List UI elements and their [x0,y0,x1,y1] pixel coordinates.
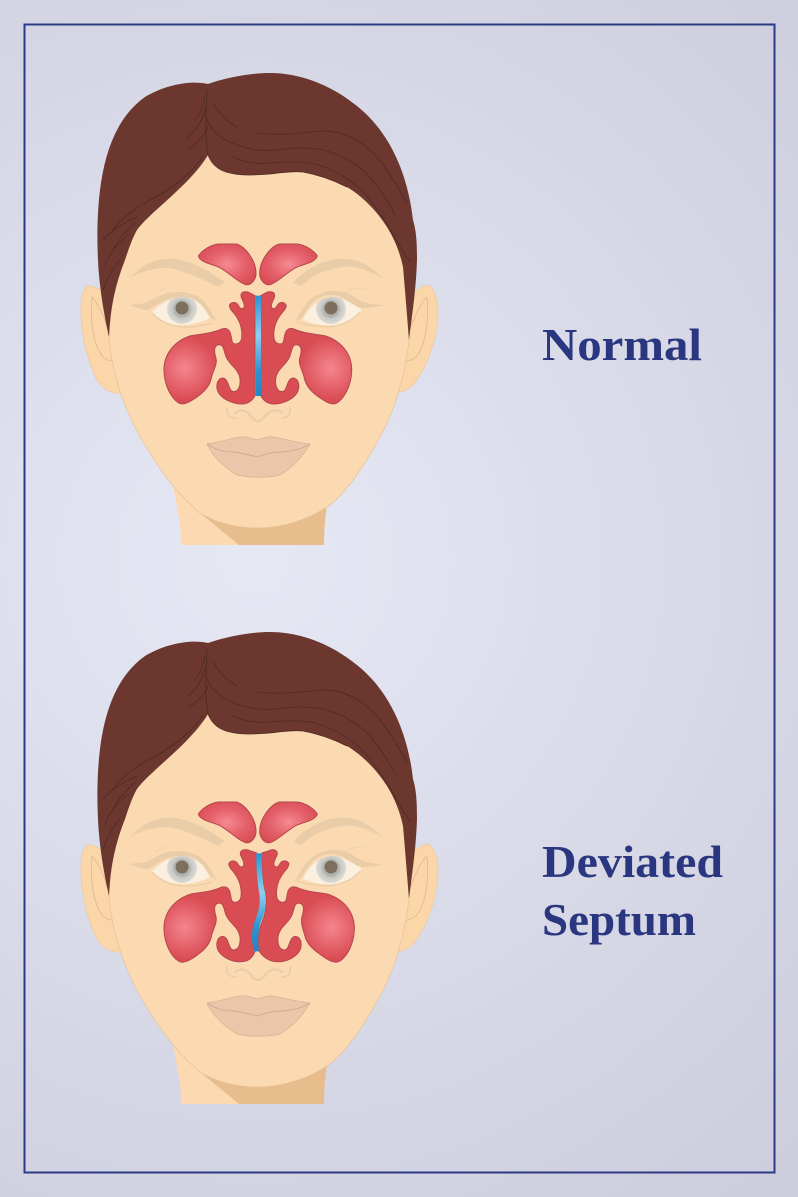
face: normal septum [81,73,438,545]
septum: straight [256,296,261,396]
label: Normal: Normal [542,319,702,370]
face: deviated septum [81,632,438,1104]
label: Deviated Septum: Deviated [542,836,723,887]
label: Deviated Septum: Septum [542,894,696,945]
label: Deviated Septum [542,836,723,945]
nasal sinuses: normal [164,244,352,404]
septum: deviated [252,853,266,951]
nasal sinuses: deviated [164,802,354,962]
